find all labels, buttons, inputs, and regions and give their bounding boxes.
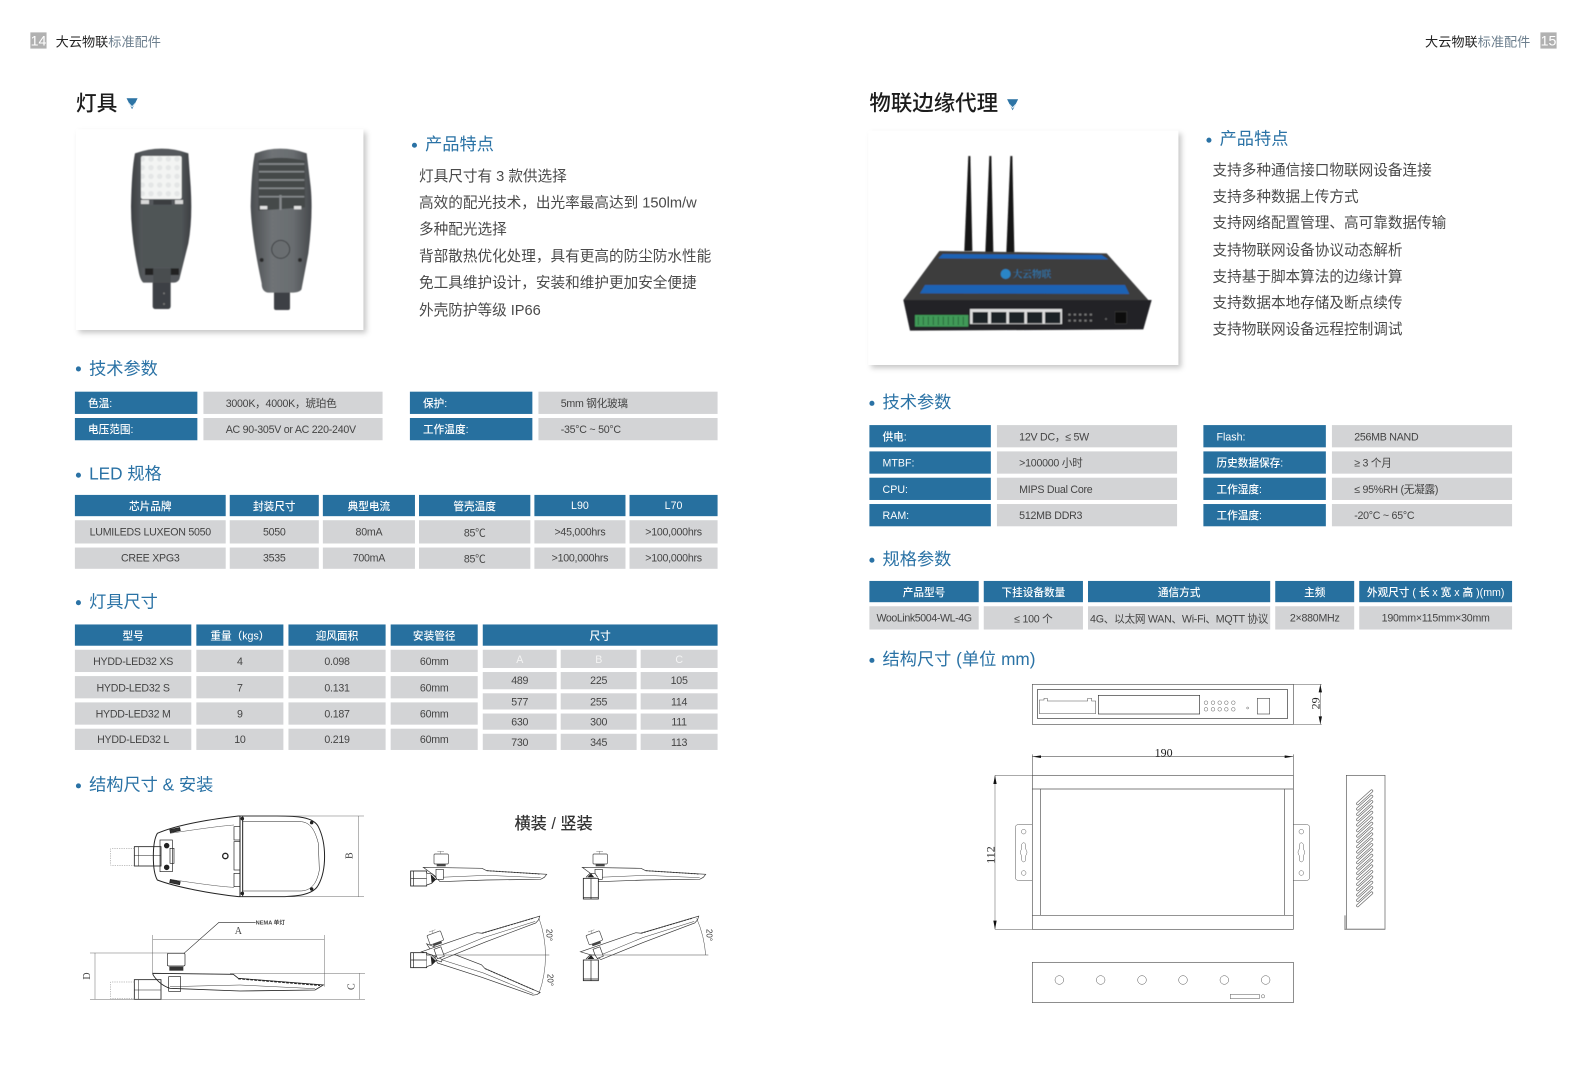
table: edge agent specification: WooLink5004-WL-4G <box>876 612 972 624</box>
vertical mount tilted 20 degrees: 20° <box>705 929 714 941</box>
text block: lamp features: 高效的配光技术，出光率最高达到 150lm/w <box>419 195 697 211</box>
dimensions A C D <box>82 926 365 999</box>
callout: NEMA label: NEMA 单灯 <box>256 918 285 926</box>
heading: horizontal / vertical mount: 横装 / 竖装 <box>514 816 593 833</box>
text block: edge agent features: 支持多种数据上传方式 <box>1212 189 1359 206</box>
table: LED spec: 85℃ <box>464 553 486 565</box>
bottom view <box>1032 962 1293 1003</box>
heading: product features right: 产品特点 <box>1220 130 1288 149</box>
table: lamp dimensions sizes: 730 <box>511 736 528 748</box>
running header left: 大云物联标准配件 <box>56 34 161 50</box>
table: edge agent parameters group 1: CPU: <box>883 483 908 495</box>
table: lamp dimensions models: 安装管径 <box>413 630 455 642</box>
table: lamp dimensions models: 10 <box>234 734 246 746</box>
table: edge agent parameters group 1 <box>869 425 1177 526</box>
text block: lamp features: 灯具尺寸有 3 款供选择 <box>419 169 567 185</box>
table: edge agent parameters group 1: >100000 小时 <box>1019 457 1083 470</box>
chart: mounting angle drawings <box>411 851 714 999</box>
table: lamp parameters group 2: 工作温度: <box>423 424 469 436</box>
chart: edge agent structure drawing <box>983 684 1385 1003</box>
title: IoT edge agent: 物联边缘代理 <box>869 92 998 115</box>
table: edge agent parameters group 1: RAM: <box>883 510 909 522</box>
table: lamp dimensions sizes: 113 <box>671 736 687 748</box>
table: lamp dimensions models: HYDD-LED32 S <box>97 682 170 694</box>
horizontal mount tilted ±20 degrees <box>411 894 555 999</box>
table: edge agent specification: 2×880MHz <box>1290 612 1340 624</box>
table: lamp parameters group 2: 保护: <box>423 398 447 410</box>
table: edge agent specification: ≤ 100 个 <box>1014 613 1053 625</box>
dimension 190 <box>1032 745 1293 775</box>
callout: NEMA label <box>184 918 285 953</box>
horizontal mount tilted ±20 degrees: 20° <box>545 929 554 941</box>
table: lamp dimensions models: 型号 <box>122 630 144 642</box>
heading: LED spec: LED 规格 <box>89 465 162 484</box>
table: lamp parameters group 1: AC 90-305V or AC 220-240V <box>226 424 356 436</box>
text block: lamp features <box>419 168 711 318</box>
text block: edge agent features <box>1212 162 1446 338</box>
panel: router photo <box>868 131 1178 365</box>
horizontal mount tilted ±20 degrees: 20° <box>546 974 555 986</box>
table: lamp dimensions models: HYDD-LED32 XS <box>93 655 173 667</box>
side view <box>1345 775 1385 929</box>
text block: edge agent features: 支持多种通信接口物联网设备连接 <box>1212 163 1432 179</box>
text block: lamp features: 背部散热优化处理，具有更高的防尘防水性能 <box>419 249 711 265</box>
table: edge agent parameters group 2: 工作温度: <box>1217 510 1262 522</box>
table: LED spec <box>74 494 718 569</box>
text block: lamp features: 外壳防护等级 IP66 <box>419 302 541 318</box>
dimension 29: 29 <box>1309 697 1323 709</box>
table: LED spec: 85℃ <box>464 527 486 539</box>
text block: edge agent features: 支持数据本地存储及断点续传 <box>1212 296 1402 312</box>
text block: edge agent features: 支持基于脚本算法的边缘计算 <box>1212 269 1402 285</box>
table: lamp dimensions sizes: 111 <box>671 716 687 728</box>
heading: specification: 规格参数 <box>883 550 951 569</box>
table: lamp dimensions sizes: 255 <box>590 696 607 708</box>
table: edge agent specification: 4G、以太网 WAN、Wi-Fi、MQTT 协议 <box>1090 613 1268 625</box>
table: edge agent specification <box>869 580 1512 630</box>
text block: edge agent features: 支持物联网设备协议动态解析 <box>1212 243 1402 259</box>
table: lamp dimensions models: HYDD-LED32 L <box>97 734 169 746</box>
table: lamp dimensions models: 7 <box>237 682 243 694</box>
table: lamp dimensions models: 60mm <box>420 708 448 720</box>
table: LED spec: 典型电流 <box>348 500 390 513</box>
table: lamp dimensions models: 重量（kgs） <box>210 630 269 642</box>
table: edge agent specification: 主频 <box>1304 587 1325 599</box>
table: LED spec: >100,000hrs <box>645 553 702 565</box>
top view <box>1015 775 1310 929</box>
table: lamp dimensions models: HYDD-LED32 M <box>96 708 171 720</box>
table: LED spec: >45,000hrs <box>554 526 605 538</box>
table: lamp dimensions models: 60mm <box>420 655 448 667</box>
table: edge agent parameters group 2: Flash: <box>1217 431 1245 443</box>
table: lamp parameters group 1 <box>74 392 382 440</box>
text block: edge agent features: 支持网络配置管理、高可靠数据传输 <box>1212 216 1446 232</box>
table: lamp dimensions sizes: 577 <box>511 696 528 708</box>
icon: title triangle left <box>126 98 138 110</box>
table: lamp dimensions models: 迎风面积 <box>316 630 358 642</box>
table: lamp dimensions sizes: 尺寸 <box>590 630 611 642</box>
table: lamp dimensions models: 60mm <box>420 682 448 694</box>
table: edge agent specification: 产品型号 <box>903 587 945 599</box>
table: lamp dimensions sizes <box>482 624 718 750</box>
table: LED spec: 管壳温度 <box>453 500 496 513</box>
heading: technical parameters right: 技术参数 <box>883 393 951 412</box>
page number 15: 15 <box>1541 32 1556 49</box>
table: lamp dimensions sizes: 114 <box>671 696 687 708</box>
table: edge agent parameters group 1: 512MB DDR3 <box>1019 510 1082 522</box>
chart: lamp top view and side view drawing <box>82 816 365 999</box>
text block: edge agent features: 支持物联网设备远程控制调试 <box>1212 322 1402 338</box>
heading: structure and installation: 结构尺寸 & 安装 <box>89 775 213 794</box>
dimension 190: 190 <box>1155 745 1173 759</box>
table: LED spec: >100,000hrs <box>552 553 608 565</box>
table: lamp dimensions sizes: 489 <box>511 675 528 687</box>
heading: lamp dimensions: 灯具尺寸 <box>89 592 158 611</box>
dimensions A C D: A <box>235 926 243 937</box>
heading: product features left: 产品特点 <box>425 135 494 154</box>
table: edge agent parameters group 1: 12V DC，≤ 5W <box>1019 431 1089 443</box>
dimension B <box>240 816 364 897</box>
table: lamp dimensions models: 0.187 <box>324 708 350 720</box>
dimensions A C D: D <box>82 972 93 980</box>
horizontal mount <box>411 851 547 886</box>
table: edge agent parameters group 2 <box>1203 425 1512 526</box>
table: lamp dimensions sizes: 105 <box>671 675 688 687</box>
table: lamp dimensions sizes: 630 <box>511 716 528 728</box>
icon: lamp front view <box>131 149 191 309</box>
title: lamp: 灯具 <box>76 92 117 115</box>
table: lamp dimensions models: 0.098 <box>324 655 350 667</box>
table: edge agent parameters group 2: -20°C ~ 65°C <box>1354 510 1414 522</box>
table: LED spec: L70 <box>665 500 682 512</box>
table: lamp dimensions models: 60mm <box>420 734 448 746</box>
table: lamp dimensions sizes: 345 <box>590 736 607 748</box>
table: LED spec: 封装尺寸 <box>253 500 296 513</box>
table: edge agent parameters group 2: ≥ 3 个月 <box>1354 457 1392 470</box>
text block: lamp features: 免工具维护设计，安装和维护更加安全便捷 <box>419 275 697 292</box>
vertical mount <box>582 851 706 899</box>
table: lamp dimensions sizes: B <box>595 653 602 665</box>
dimensions A C D: C <box>346 983 357 990</box>
table: LED spec: 芯片品牌 <box>129 500 172 513</box>
table: LED spec: 5050 <box>263 526 286 538</box>
table: edge agent parameters group 1: 供电: <box>883 431 907 443</box>
dimension 29 <box>1293 684 1323 724</box>
page number 14: 14 <box>31 32 46 49</box>
icon: title triangle right <box>1007 99 1018 110</box>
lamp side view <box>111 953 323 999</box>
table: LED spec: >100,000hrs <box>645 526 702 538</box>
table: lamp dimensions sizes: C <box>675 653 683 665</box>
table: edge agent parameters group 2: 256MB NAND <box>1354 431 1418 443</box>
front view <box>1032 684 1293 724</box>
table: lamp dimensions models: 0.219 <box>324 734 350 746</box>
table: edge agent parameters group 2: 历史数据保存: <box>1217 457 1283 470</box>
table: edge agent parameters group 1: MIPS Dual Core <box>1019 483 1092 495</box>
table: lamp dimensions models <box>74 624 478 750</box>
icon: lamp back view <box>251 149 312 310</box>
running header right: 大云物联标准配件 <box>1425 34 1530 50</box>
table: LED spec: LUMILEDS LUXEON 5050 <box>90 526 211 538</box>
table: LED spec: L90 <box>571 500 589 512</box>
heading: technical parameters left: 技术参数 <box>89 359 158 378</box>
table: LED spec: 3535 <box>263 553 286 565</box>
table: lamp dimensions sizes: 300 <box>590 716 607 728</box>
table: edge agent parameters group 1: MTBF: <box>883 457 914 469</box>
icon: edge router <box>903 156 1152 331</box>
table: lamp parameters group 2 <box>410 392 718 440</box>
table: edge agent specification: 外观尺寸 ( 长 x 宽 x 高 )(mm) <box>1367 587 1504 599</box>
lamp top view <box>111 816 325 897</box>
dimension 112: 112 <box>983 846 997 864</box>
table: lamp parameters group 1: 色温: <box>88 398 112 410</box>
text block: lamp features: 多种配光选择 <box>419 222 507 238</box>
table: lamp dimensions sizes: A <box>516 653 523 665</box>
table: lamp parameters group 1: 3000K，4000K，琥珀色 <box>226 398 337 410</box>
heading: structure dimensions: 结构尺寸 (单位 mm) <box>883 650 1035 669</box>
table: lamp parameters group 2: 5mm 钢化玻璃 <box>561 398 628 410</box>
table: lamp dimensions models: 0.131 <box>324 682 350 694</box>
panel: lamp photo <box>76 129 363 330</box>
table: LED spec: 700mA <box>353 553 385 565</box>
table: edge agent specification: 下挂设备数量 <box>1001 587 1065 599</box>
table: edge agent specification: 190mm×115mm×30mm <box>1382 612 1490 624</box>
table: LED spec: CREE XPG3 <box>121 553 180 565</box>
table: lamp dimensions models: 4 <box>237 655 243 667</box>
table: edge agent parameters group 2: 工作湿度: <box>1217 484 1262 496</box>
table: LED spec: 80mA <box>356 526 382 538</box>
dimension B: B <box>345 852 356 859</box>
table: lamp parameters group 1: 电压范围: <box>88 424 134 436</box>
icon: edge router: 大云物联 <box>1013 268 1052 280</box>
table: edge agent parameters group 2: ≤ 95%RH (无凝露) <box>1354 484 1438 496</box>
vertical mount tilted 20 degrees <box>575 894 714 981</box>
dimension 112 <box>983 775 1032 929</box>
table: lamp parameters group 2: -35°C ~ 50°C <box>561 424 621 436</box>
table: edge agent specification: 通信方式 <box>1158 587 1200 599</box>
table: lamp dimensions sizes: 225 <box>590 675 607 687</box>
table: lamp dimensions models: 9 <box>237 708 243 720</box>
